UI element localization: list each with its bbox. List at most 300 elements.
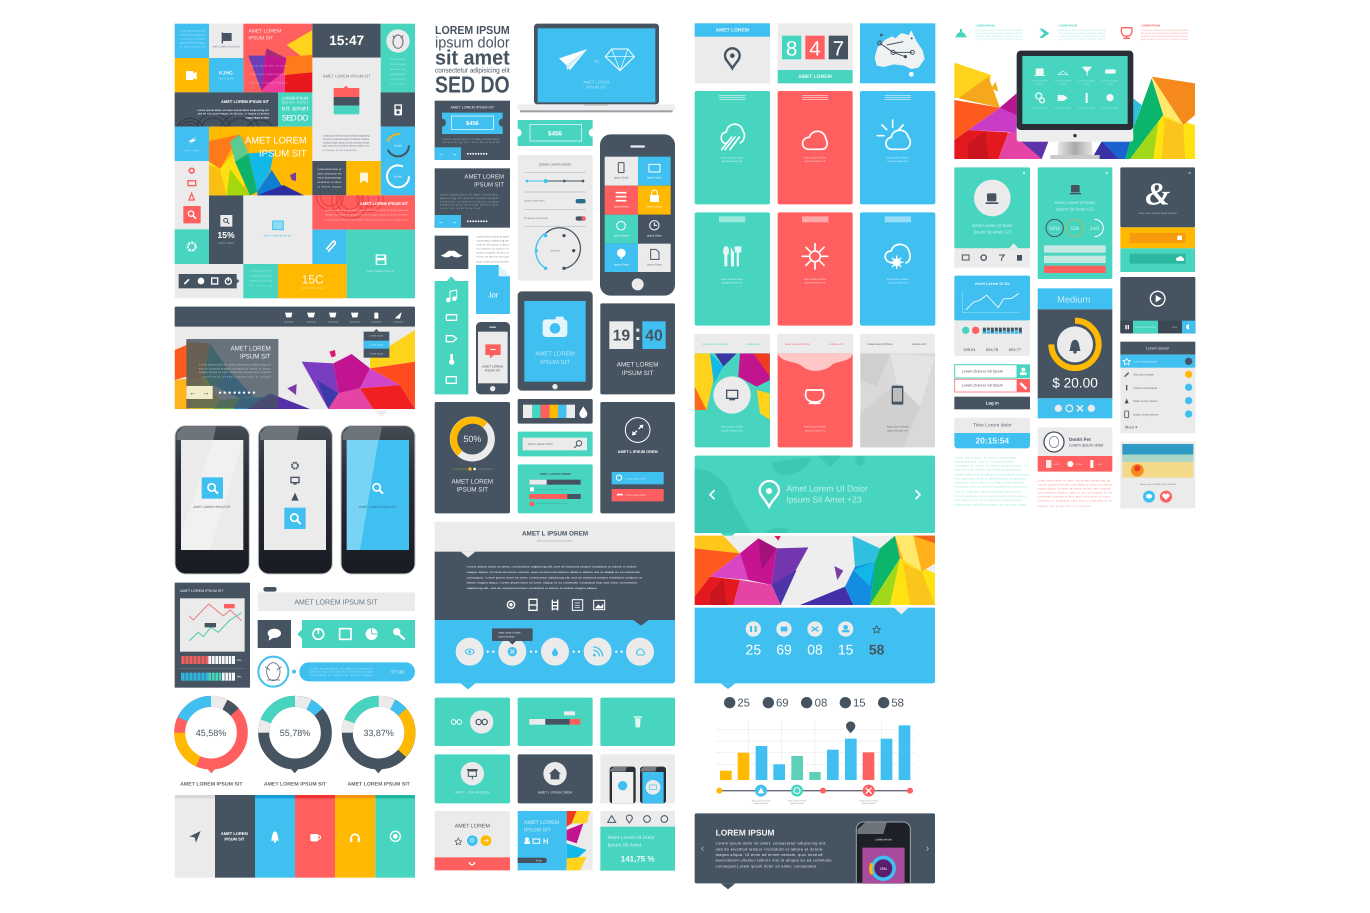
icon: paperclip — [326, 241, 335, 252]
search box — [518, 432, 593, 456]
icon: speech bubble tile — [258, 620, 291, 648]
menu list: Lorem Amet Ipsum — [1133, 360, 1157, 363]
line chart card — [954, 276, 1030, 356]
card: cup counters: Amet Lorem UI Dolor — [1055, 200, 1096, 205]
phone two — [258, 426, 332, 574]
promo dark panel: magna aliqua. Ut enim ad minim veniam, quis nostrud — [716, 853, 822, 857]
timeline axis: Ipsum Sit Amet — [754, 802, 768, 805]
desktop monitor: sit amet — [1083, 83, 1090, 85]
statistic 15C: 15C — [302, 272, 324, 286]
line chart card: 90% — [237, 659, 241, 662]
panel: colour tile mosaic: consectetur adipisicing elit — [250, 73, 287, 76]
heading: typographic block: consectetur adipisicing elit — [435, 67, 510, 74]
line chart card: AMET LOREM IPSUM SIT — [180, 589, 224, 593]
arcs in dark tile — [177, 113, 274, 127]
panel: colour tile mosaic: eiusmod tempor — [180, 38, 205, 40]
donut card 50%: AMET LOREM — [451, 478, 493, 485]
feature note: bell: LOREM IPSUM — [976, 24, 995, 27]
settings panel: 00:00:00 — [550, 250, 560, 252]
action card: Lorem Ipsum Orem — [625, 494, 645, 497]
menu list — [1120, 342, 1195, 433]
icon: camera — [186, 71, 197, 80]
blue band foot and statistics chart — [695, 679, 935, 889]
profile card — [1038, 427, 1112, 472]
promo dark panel: exercitation ullamco laboris nisi ut aliquip ex ea commodo — [716, 859, 832, 863]
red text block: Lorem ipsum dolor sit amet, consectetur adipiscing elit, — [1038, 479, 1111, 482]
panel: colour tile mosaic: incididunt — [390, 78, 405, 81]
teal location banner: Ipsum Sit Amet +23 — [786, 495, 862, 505]
panel: stacked header, text and icon steps — [435, 522, 675, 689]
hero overlay — [186, 339, 278, 408]
card: partly sunny: Amet Lorem UI Dolor — [887, 157, 909, 159]
body text: quis nostrud exercitation — [477, 260, 509, 263]
phone mock in promo panel — [856, 822, 910, 883]
ticket card: adipisicing elit sed do eiusmod — [443, 141, 499, 144]
arcs in red tile — [316, 195, 384, 219]
text card with carousel: Lorem ipsum dolor sit amet consectetur — [440, 194, 499, 196]
blue stats band: 08 — [807, 642, 823, 658]
panel: colour tile mosaic: ut enim ad minim — [180, 46, 205, 48]
feature note: arrow — [1039, 24, 1106, 41]
panel: lower left widgets — [175, 583, 415, 878]
timer: Time Lorem dolor — [973, 422, 1012, 428]
teal text block: incididunt ut labore et dolore magna aliqua. Ut — [954, 464, 1027, 467]
column two middle widgets — [435, 265, 675, 513]
panel: colour tile mosaic: incididunt ut labore — [317, 181, 341, 184]
teal text block: duis aute irure dolor in reprehenderit in voluptate — [954, 477, 1026, 480]
panel: colour tile mosaic: consectetur adipisicing — [180, 34, 205, 36]
tooltip — [492, 628, 533, 645]
colour tab bar: IPSUM SIT — [224, 837, 245, 841]
timeline axis: Ipsum Sit Amet — [862, 802, 875, 805]
card: grey polygon phone: Amet Lorem UI Dolor — [868, 343, 893, 346]
tablet: IPSUM SIT — [540, 359, 570, 365]
small tile grid — [435, 698, 675, 871]
feature note: bell — [955, 24, 1022, 41]
statistic row: 08 — [815, 697, 827, 709]
card: rainbow monitor: Ipsum Sit Amet +23 — [722, 430, 742, 432]
login form: Log in — [986, 400, 999, 405]
panel: colour tile mosaic: IPSUM SIT — [259, 148, 307, 159]
panel: colour tile mosaic: Lorem ipsum dolor sit amet consectetur adipisicing — [323, 135, 369, 137]
settings panel: Ph Ipsum Lorem Orem — [524, 217, 548, 220]
menu list: Dolor Lorem Ipsum — [1133, 399, 1157, 403]
text card with carousel: adipisicing elit sed do eiusmod tempor — [440, 197, 499, 200]
settings panel — [518, 155, 593, 281]
body text: consectetur adipisicing elit — [477, 240, 509, 242]
price card: $ 20.00 — [1052, 375, 1098, 391]
text card with carousel: nostrud exercitation — [440, 207, 480, 210]
desktop monitor: Lorem ipsum dolor — [1054, 107, 1071, 109]
flip clock — [600, 303, 675, 394]
feature note: wine: Lorem ipsum dolor sit amet consectetur adipisicing — [1141, 29, 1188, 32]
photo card — [1120, 442, 1195, 508]
profile card: Dmitri Fet — [1069, 437, 1091, 442]
teal text block: sunt in culpa qui officia deserunt mollit anim — [954, 490, 1021, 493]
panel: colour tile mosaic: Lorem ipsum dolor sit amet consectetur adipisicing elit — [197, 109, 269, 112]
panel: colour tile mosaic: sed do eiusmod tempor — [317, 177, 342, 179]
ribbon heading — [258, 587, 415, 611]
desktop monitor: Lorem ipsum dolor — [1078, 107, 1095, 109]
laptop: AMET LOREM — [583, 80, 610, 84]
card: cup profile: Amet Lorem UI Dolor — [972, 223, 1013, 228]
feature note: bell: et dolore magna aliqua ut enim ad minim veniam — [976, 35, 1022, 38]
flip clock: AMET LOREM — [617, 361, 659, 368]
panel: colour tile mosaic: AMET LOREM IPSUM SIT — [221, 99, 269, 104]
icon: gear — [187, 242, 197, 252]
video player — [1120, 277, 1195, 333]
blue stats band: 69 — [776, 642, 792, 658]
blue stats band — [695, 608, 935, 683]
panel: colour tile mosaic: IPSUM SIT — [248, 35, 273, 41]
step circles — [456, 638, 654, 666]
desktop monitor — [1017, 51, 1133, 159]
panel: colour tile mosaic: tempor incididunt ut labore et dolore magna aliqua ut enim ad minim — [325, 214, 408, 216]
location tile — [695, 23, 770, 83]
card: cloud — [778, 91, 853, 204]
heading: typographic block: LOREM IPSUM — [435, 24, 510, 37]
card: wine glass: Amet Lorem UI Dolor — [804, 426, 826, 428]
text card with carousel: incididunt ut labore et dolore magna — [440, 200, 498, 203]
promo dark panel: LOREM IPSUM — [716, 828, 774, 838]
text card with carousel: → — [451, 218, 458, 225]
red text block: sed do eiusmod tempor incididunt ut labore et dolore — [1038, 483, 1112, 486]
timeline axis — [716, 785, 913, 805]
panel: colour tile mosaic: Lorem ipsum dolor sit amet consectetur adipisicing elit sed do eiusmod — [325, 209, 408, 212]
typographic tile: SED DO — [282, 114, 308, 123]
stat tile 141,75 %: Ipsum Sit Amet — [608, 842, 642, 848]
donut 55,78%: 55,78% — [280, 728, 310, 738]
phone with app grid: Ipsum Orem — [647, 263, 662, 266]
polygons in red tile — [248, 30, 312, 92]
laptop: VS — [594, 60, 599, 64]
panel: colour tile mosaic: quis nostrud exercitation ullamco laboris nisi — [323, 145, 369, 147]
card: cutlery — [695, 212, 770, 326]
statistic 15%: AMET LOREM — [218, 242, 234, 245]
panel: colour tile mosaic: ut labore — [390, 82, 405, 85]
teal text block: excepteur sint occaecat cupidatat non proident — [954, 485, 1028, 488]
card: cup counters: DFG — [1049, 226, 1060, 231]
promo dark panel: sed do eiusmod tempor incididunt ut labore et dolore — [716, 847, 822, 851]
feature note: wine — [1121, 24, 1188, 41]
hero overlay: sed do eiusmod tempor incididunt ut labore et dolore — [199, 367, 271, 370]
desktop monitor: sit amet — [1106, 83, 1114, 85]
panel: colour tile mosaic: et dolore magna aliqua ut enim ad minim veniam — [323, 141, 369, 144]
statistic 15C: AMET LOREM IPSUM — [301, 287, 324, 290]
desktop monitor: Lorem ipsum dolor — [1031, 107, 1048, 109]
rainbow polygons — [209, 134, 304, 195]
icon toolbar — [179, 274, 239, 288]
phone three: AMET LOREM IPSUM SIT — [359, 505, 397, 509]
menu list: More ▾ — [1125, 425, 1137, 430]
progress bars card — [518, 464, 593, 513]
donut 55,78% — [264, 701, 326, 773]
phone three — [341, 426, 415, 574]
feature note: bell: quis nostrud exercitation ullamco laboris — [976, 38, 1022, 41]
settings panel: Ipsum Lorem Orem — [524, 200, 544, 202]
card: cup profile — [954, 167, 1030, 268]
card: cup counters: × — [1105, 170, 1108, 175]
laptop: IPSUM SIT — [586, 85, 607, 90]
ticket card: •••••••• — [467, 150, 488, 158]
card: cloud: Amet Lorem UI Dolor — [804, 157, 826, 159]
teal text block: velit esse cillum dolore eu fugiat nulla pariatur — [954, 481, 1024, 484]
flip clock: IPSUM SIT — [622, 370, 654, 377]
heading: typographic block: ipsum dolor — [435, 33, 510, 51]
line chart card: 654,77 — [1009, 347, 1021, 352]
timeline axis: Amet Lorem UI Dolor — [752, 800, 770, 802]
menu list: Ipsum Lorem Ipsum — [1133, 413, 1158, 416]
line chart card: 159,54 — [963, 347, 976, 352]
menu list: Lorem ipsum — [1146, 346, 1169, 350]
line chart card — [175, 583, 250, 688]
dropdown menu — [364, 329, 389, 358]
typographic tile: LOREM IPSUM — [282, 96, 308, 101]
panel: colour tile mosaic: AMET LOREM IPSUM SIT — [323, 74, 371, 79]
statistic 15%: 15% — [217, 230, 235, 240]
desktop monitor: Lorem ipsum dolor — [1054, 80, 1071, 82]
tablet: AMET LOREM — [535, 350, 575, 357]
stacked menu — [334, 86, 359, 114]
feature note: arrow: et dolore magna aliqua ut enim ad minim veniam — [1058, 35, 1106, 38]
red text block — [1038, 479, 1112, 508]
teal text block: iste natus error sit voluptatem accusantium — [954, 499, 1021, 502]
phone with app grid: Ipsum Orem — [647, 176, 662, 179]
file tile: .lor — [488, 290, 498, 299]
column two top widgets — [435, 24, 675, 296]
panel: colour tile mosaic: Lorem ipsum dolor sit amet — [250, 65, 287, 67]
feature note: bell: Lorem ipsum dolor sit amet consectetur adipisicing — [976, 29, 1022, 32]
teal ticket: $456 — [548, 130, 562, 137]
panel: colour tile mosaic: AMET LOREM — [184, 150, 199, 152]
timer: 20:15:54 — [976, 436, 1009, 446]
header title: AMET L IPSUM OREM — [522, 530, 588, 537]
text card with carousel: •••••••• — [467, 218, 488, 225]
panel: colour tile mosaic — [175, 24, 415, 298]
home tile: AMET L IPSUM OREM — [538, 791, 572, 795]
card: rain: Ipsum Sit Amet +23 — [722, 160, 742, 163]
card: snow cloud: Amet Lorem UI Dolor — [887, 278, 909, 281]
heading: typographic block: SED DO — [435, 72, 510, 98]
body text: Lorem ipsum dolor sit amet — [477, 236, 509, 238]
card: rainbow monitor: Amet Lorem UI Dolor — [703, 343, 728, 346]
promo tile — [518, 811, 593, 870]
menu list: Sit Lorem Ipsum — [1133, 373, 1154, 376]
donut card 50% — [435, 402, 510, 513]
card: rainbow monitor — [695, 334, 770, 447]
blue stats band: 25 — [746, 642, 761, 658]
panel: colour tile mosaic: AMET LOREM — [218, 78, 234, 80]
donut 33,87% — [347, 701, 410, 773]
small phone: IPSUM SIT — [485, 369, 501, 372]
card: ampersand: × — [1188, 170, 1191, 175]
slider tile — [518, 698, 593, 746]
column four lower widgets — [954, 276, 1195, 508]
heading: typographic block: sit amet — [435, 46, 510, 69]
panel: colour tile mosaic: KJHG — [219, 70, 233, 76]
hero overlay: magna aliqua ut enim ad minim veniam quis nostrud — [199, 371, 271, 374]
icon: bolt — [187, 136, 197, 146]
donut 45,58%: 45,58% — [196, 728, 226, 738]
teal text block: ullamco laboris nisi ut aliquip ex ea commodo consequat — [954, 473, 1030, 476]
feature note: wine: et dolore magna aliqua ut enim ad minim veniam — [1141, 35, 1188, 38]
nav icons — [284, 312, 403, 322]
panel: colour tile mosaic: sed do tempor — [390, 73, 405, 76]
avatar with message pill: adipisicing elit sed do eiusmod tempor — [309, 671, 373, 673]
red text block: magna aliqua. Ut enim ad minim veniam, quis nostrud — [1038, 487, 1110, 490]
icon: music player — [394, 104, 402, 115]
panel: colour tile mosaic: elit sed do eiusmod tempor incididunt ut labore — [323, 138, 369, 141]
heading: typographic block — [435, 24, 510, 98]
digit counter 847: 7 — [833, 37, 844, 60]
presentation tile: AMET L IPSUM OREM — [455, 791, 489, 795]
statistic row: 69 — [776, 697, 789, 709]
digit counter 847 — [778, 23, 853, 83]
timeline axis: Ipsum Sit Amet — [790, 802, 804, 805]
phones row — [175, 426, 415, 574]
card: cutlery: Amet Lorem UI Dolor — [721, 278, 743, 281]
promo tile: IPSUM SIT — [524, 827, 551, 833]
card: cup counters: Ipsum Sit Amet +23 — [1056, 207, 1094, 212]
red text block: fugiat nulla pariatur excepteur — [1038, 505, 1091, 508]
phone with app grid — [600, 134, 675, 296]
profile card: Lorem — [1096, 463, 1102, 466]
body paragraph: dolore magna aliqua. Lorem ipsum dolor sit amet, aliquip ex ea commodo consequat duis aute irure, consectetur — [467, 582, 638, 584]
phone mock in promo panel: 25% — [880, 867, 887, 871]
panel: colour tile mosaic: adipisicing elit sed — [249, 280, 272, 282]
donut captions: AMET LOREM IPSUM SIT — [180, 781, 242, 787]
panel: colour tile mosaic: Lorem ipsum dolor sit — [180, 30, 205, 32]
feature note: bell: elit sed do eiusmod tempor incididunt ut labore — [976, 32, 1022, 35]
card: snow cloud — [860, 212, 935, 326]
panel: colour tile mosaic: sed do eiusmod tempor — [250, 81, 287, 84]
panel: colour tile mosaic: AMET LOREM IPSUM SIT — [367, 270, 395, 273]
rainbow polygon strip — [695, 536, 935, 605]
desktop monitor: Lorem ipsum dolor — [1078, 80, 1095, 82]
stat tile 141,75 %: Amet Lorem UI Dolor — [608, 835, 655, 840]
promo dark panel — [695, 813, 935, 889]
laptop — [518, 24, 675, 112]
panel: colour tile mosaic: amet consectetur elit — [317, 172, 341, 175]
card: grey polygon phone: Ipsum Sit Amet +23 — [888, 430, 908, 432]
body text — [477, 236, 509, 263]
statistic row: 15 — [853, 697, 866, 709]
icon: moustache tile — [435, 236, 468, 269]
card: wine glass — [778, 334, 853, 447]
small phone — [476, 322, 510, 394]
card: ampersand: & — [1145, 176, 1170, 211]
red text block: commodo consequat duis aute irure dolor in repre — [1038, 495, 1110, 498]
column three cards and banner — [695, 334, 935, 683]
stat tile 141,75 % — [600, 811, 675, 871]
ticket card: AMET LOREM IPSUM SIT — [451, 105, 494, 109]
donut 33,87%: 33,87% — [363, 728, 394, 738]
clock heading: 15:47 — [329, 33, 364, 48]
avatar tile — [386, 29, 410, 53]
typographic tile — [282, 96, 308, 123]
text card with carousel: ← — [438, 218, 445, 225]
body paragraph — [467, 566, 642, 590]
video player: -:14:3 — [1171, 326, 1177, 329]
ticket card: ← — [438, 150, 445, 158]
body paragraph: Lorem ipsum dolor sit amet, consectetur adipiscing elit, sed do eiusmod tempor incididunt ut labore et dolore — [467, 566, 637, 568]
panel: colour tile mosaic: adipisicing — [390, 68, 405, 71]
price card — [1038, 288, 1112, 418]
panel: colour tile mosaic: do eiusmod — [249, 285, 272, 287]
panel: colour tile mosaic: dolor sit amet — [390, 63, 405, 66]
phone with app grid: Ipsum Orem — [647, 234, 662, 237]
panel: colour tile mosaic: Lorem ipsum — [390, 58, 405, 61]
statistic 15% — [217, 215, 235, 245]
teal ticket — [518, 120, 593, 146]
donut card 50%: IPSUM SIT — [456, 486, 488, 493]
card: rainbow monitor: Amet Lorem UI Dolor — [721, 426, 743, 428]
ticket card: Lorem ipsum dolor sit amet consectetur — [443, 138, 500, 141]
line chart card: 78% — [237, 676, 241, 678]
statistic row — [724, 697, 904, 709]
map tile — [860, 23, 935, 83]
hero overlay: exercitation ullamco laboris nisi ut aliquip — [202, 375, 271, 378]
left rainbow polygons — [175, 330, 415, 409]
digit counter 847: 8 — [786, 37, 797, 60]
flip clock: 19 — [613, 326, 630, 344]
line chart card: Amet Lorem Ui Do — [975, 281, 1010, 286]
settings panel: Ipsum Lorem Orem — [539, 163, 571, 167]
feature note: arrow: LOREM IPSUM — [1058, 24, 1077, 27]
action card — [600, 402, 675, 513]
statistic row: 58 — [891, 697, 904, 709]
typographic tile: ipsum dolor — [282, 100, 308, 105]
phone with app grid: Ipsum Orem — [647, 205, 662, 208]
panel: website banner with nav — [175, 307, 415, 417]
card: ampersand: Amet Lorem UI Dolor Ipsum Sit Amet — [1139, 212, 1177, 215]
hero overlay: IPSUM SIT — [240, 353, 271, 360]
action card: Lorem Ipsum Orem — [625, 478, 645, 480]
card: cup counters: 1AS — [1090, 226, 1099, 231]
card: sun: Amet Lorem UI Dolor — [804, 278, 826, 281]
panel: colour tile mosaic: Lorem ipsum dolor — [249, 270, 272, 272]
teal text block: adipiscing elit, sed do eiusmod tempor — [954, 460, 1014, 463]
phone one: AMET LOREM IPSUM SIT — [193, 505, 231, 509]
tooltip: Ipsum Sit Amet — [499, 635, 514, 638]
progress rings: 45,58% — [394, 145, 402, 147]
teal location banner: Amet Lorem UI Dolor — [786, 484, 868, 494]
promo tile: AMET LOREM — [524, 820, 559, 825]
teal text block: doloremque laudantium totam rem aperiam eaque — [954, 503, 1026, 506]
progress bars card: AMET L IPSUM OREM — [539, 472, 571, 476]
icon: floppy — [376, 254, 386, 265]
home tile — [518, 754, 593, 803]
menu list: Amet Lorem Ipsum — [1133, 386, 1157, 390]
icon: blue tile icon — [273, 221, 283, 230]
blue stats band: 58 — [869, 642, 884, 658]
donut captions — [180, 781, 410, 787]
text card with carousel — [435, 168, 510, 228]
avatar with message pill: Lorem ipsum dolor sit amet consectetur — [309, 667, 373, 670]
teal icon strip — [435, 276, 468, 394]
teal location banner — [695, 456, 935, 539]
login style tile — [435, 811, 510, 870]
hero overlay: Lorem ipsum dolor sit amet consectetur adipisicing elit — [199, 364, 271, 366]
card: wine glass: A Amet +23 — [829, 343, 843, 346]
phone with app grid: Ipsum Orem — [614, 176, 629, 179]
phone with app grid: Ipsum Orem — [614, 263, 629, 266]
icon: flag — [222, 32, 232, 43]
colour tab bar: AMET LOREM — [221, 831, 248, 836]
feature note: wine: quis nostrud exercitation ullamco laboris — [1141, 38, 1188, 41]
progress rings — [387, 134, 409, 187]
panel: colour tile mosaic: AMET LOREM — [245, 135, 307, 146]
